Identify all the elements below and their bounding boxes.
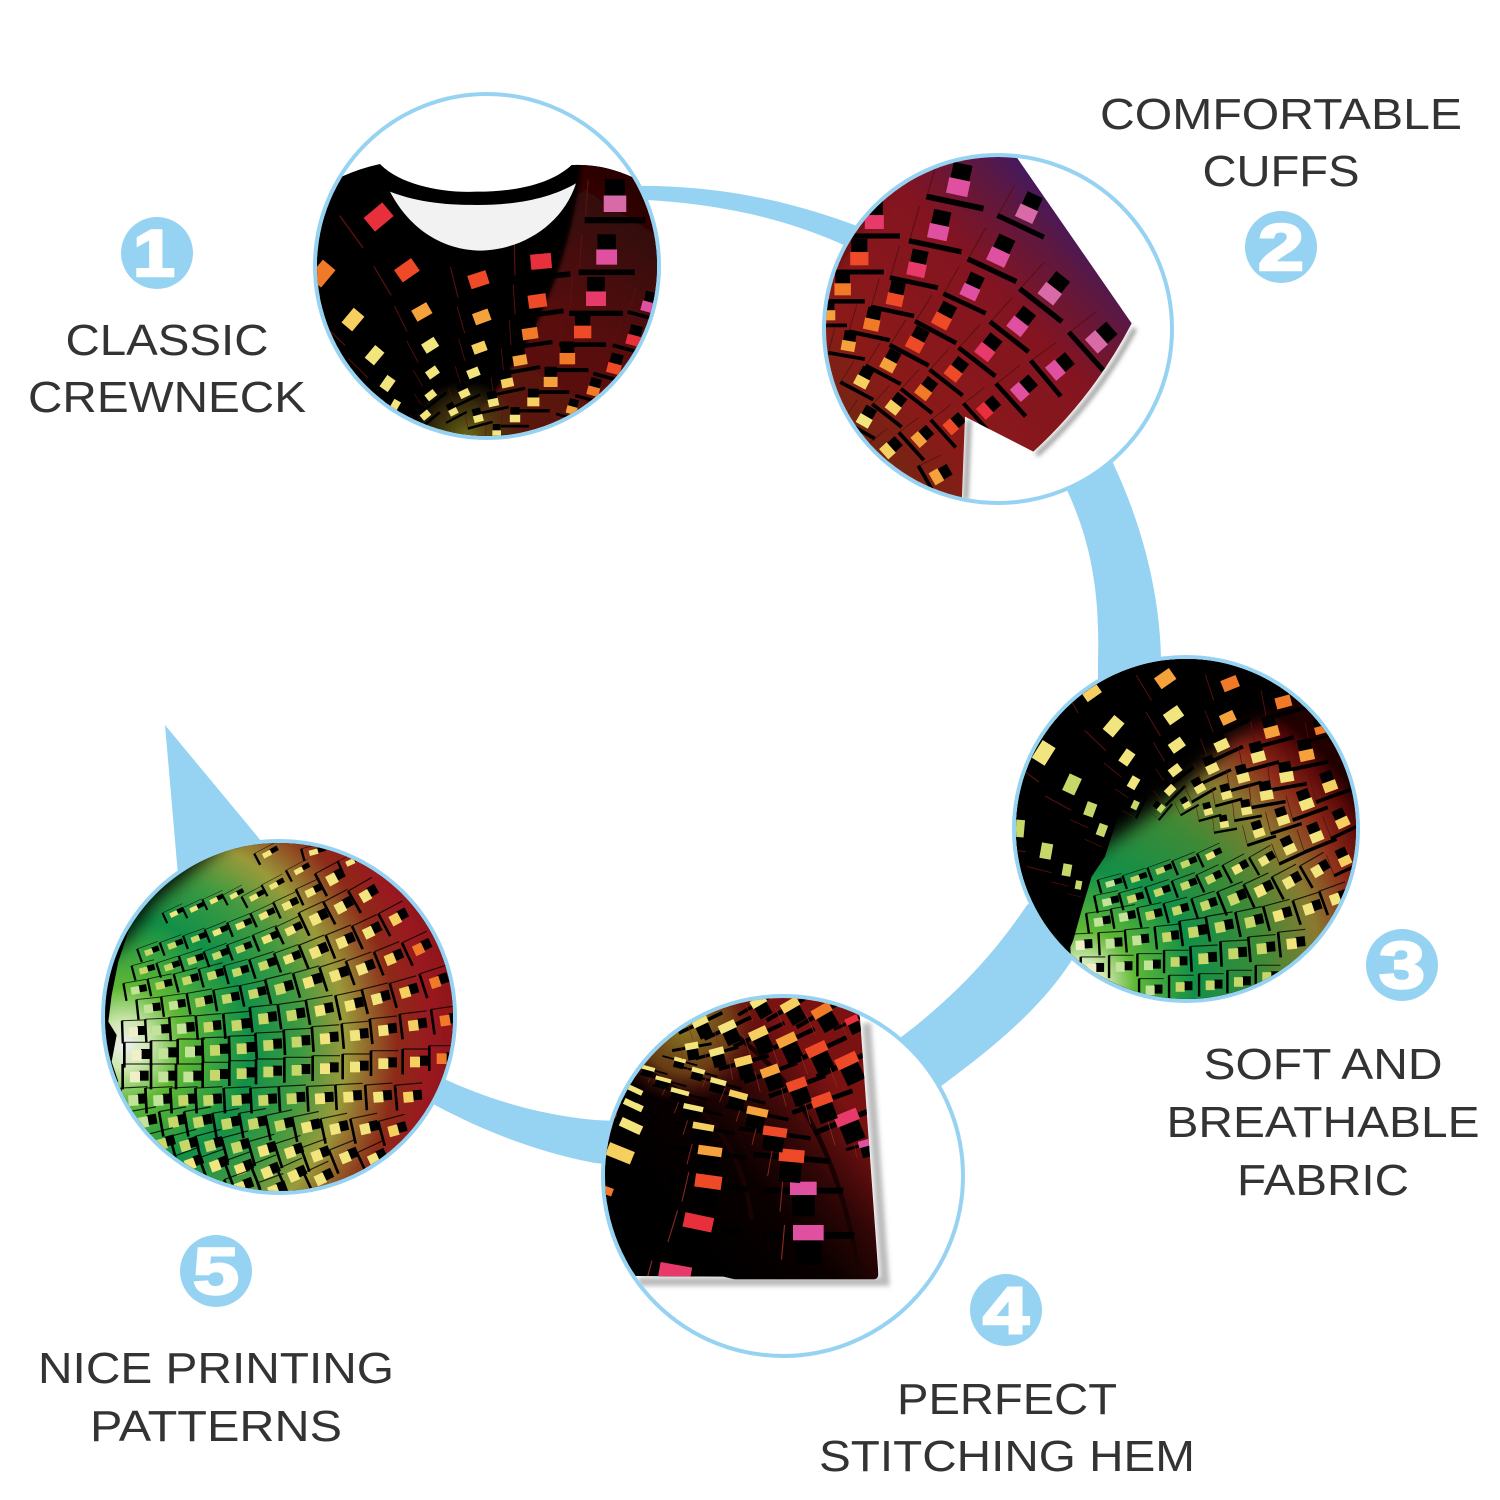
label 2: comfortable cuffs <box>1100 90 1462 196</box>
label 5: nice printing patterns: NICE PRINTING <box>38 1344 394 1393</box>
label 2: comfortable cuffs: COMFORTABLE <box>1100 90 1462 139</box>
photo circle 3: soft and breathable fabric <box>1012 655 1360 1003</box>
label 1: classic crewneck: CREWNECK <box>28 373 306 422</box>
label 4: perfect stitching hem: PERFECT <box>897 1375 1117 1424</box>
label 3: soft and breathable fabric: BREATHABLE <box>1166 1098 1480 1147</box>
label 4: perfect stitching hem <box>819 1375 1195 1481</box>
label 2: comfortable cuffs: CUFFS <box>1202 147 1360 196</box>
badge 3 <box>1366 928 1438 1002</box>
label 1: classic crewneck <box>28 316 306 422</box>
badge 1 <box>121 216 193 290</box>
badge 4 <box>970 1273 1042 1347</box>
photo circle 4: perfect stitching hem <box>601 994 965 1358</box>
badge 5: 5 <box>193 1234 239 1308</box>
badge 4: 4 <box>983 1273 1029 1347</box>
badge 1: 1 <box>133 216 175 290</box>
label 3: soft and breathable fabric: FABRIC <box>1237 1156 1409 1205</box>
label 3: soft and breathable fabric: SOFT AND <box>1204 1040 1442 1089</box>
label 5: nice printing patterns: PATTERNS <box>90 1402 342 1451</box>
label 3: soft and breathable fabric <box>1166 1040 1480 1205</box>
badge 5 <box>180 1234 252 1308</box>
photo circle 2: comfortable cuffs <box>822 153 1174 505</box>
label 4: perfect stitching hem: STITCHING HEM <box>819 1432 1195 1481</box>
photo circle 5: nice printing patterns <box>101 839 457 1195</box>
photo circle 1: classic crewneck <box>313 92 661 440</box>
badge 2: 2 <box>1258 210 1304 284</box>
label 1: classic crewneck: CLASSIC <box>66 316 268 365</box>
badge 3: 3 <box>1379 928 1425 1002</box>
swoosh ring with arrow <box>165 186 1161 1168</box>
label 5: nice printing patterns <box>38 1344 394 1451</box>
badge 2 <box>1245 210 1317 284</box>
